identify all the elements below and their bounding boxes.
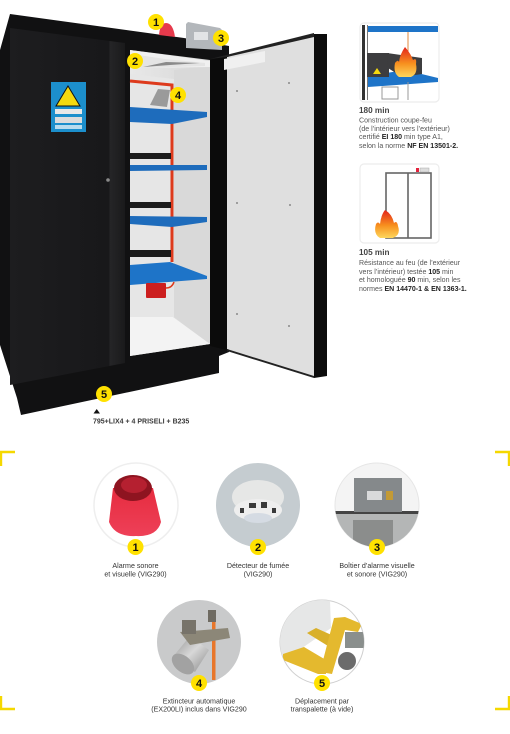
corner bracket top left xyxy=(1,452,15,466)
interior xyxy=(130,50,210,356)
text: 105 min xyxy=(359,248,467,293)
text: 105 min: normes EN 14470-1 & EN 1363-1. xyxy=(359,286,467,293)
product reference: 795+LIX4 + 4 PRISELI + B235 xyxy=(93,418,189,426)
feature 5: pallet truck: Déplacement par xyxy=(295,698,350,706)
feature 2: smoke detector: (VIG290) xyxy=(244,570,272,578)
text: 180 min: selon la norme NF EN 13501-2. xyxy=(359,143,458,150)
text: 180 min: (de l’intérieur vers l’extérieur) xyxy=(359,126,450,133)
feature 2: smoke detector: Détecteur de fumée xyxy=(227,562,289,570)
feature 4: extinguisher: Extincteur automatique xyxy=(163,698,235,706)
rails xyxy=(130,153,171,159)
shelves xyxy=(130,107,207,285)
text: 180 min: Construction coupe-feu xyxy=(359,118,432,124)
safety sign xyxy=(51,82,86,132)
text: 180 min: certifié EI 180 min type A1, xyxy=(359,134,443,141)
extinguisher xyxy=(150,89,170,107)
text: 180 min: 180 min xyxy=(359,106,390,115)
text: 105 min: et homologuée 90 min, selon les xyxy=(359,277,461,284)
feature 5: pallet truck xyxy=(280,600,365,714)
door closer xyxy=(224,51,265,70)
feature 4: extinguisher: 4 xyxy=(196,678,203,690)
feature 1: alarm xyxy=(94,463,178,578)
feature 3: alarm box: et sonore (VIG290) xyxy=(347,570,407,578)
marker 5: 5 xyxy=(101,389,107,401)
corner bracket bottom right xyxy=(495,696,509,709)
text: 180 min xyxy=(359,106,458,150)
open door frame xyxy=(210,55,227,350)
marker 1 xyxy=(148,14,164,30)
marker 2: 2 xyxy=(132,56,138,68)
text: 105 min: vers l’intérieur) testée 105 min xyxy=(359,269,453,276)
text: 105 min: Résistance au feu (de l’extérieur xyxy=(359,260,461,267)
left door xyxy=(10,28,125,385)
marker 4: 4 xyxy=(175,90,182,102)
top smoke detector plate xyxy=(132,54,205,68)
alarm box on top xyxy=(186,22,222,50)
feature 5: pallet truck: 5 xyxy=(319,678,325,690)
corner bracket bottom left xyxy=(1,696,15,709)
red cable xyxy=(130,81,172,262)
text: 105 min: 105 min xyxy=(359,248,390,257)
marker 2 xyxy=(127,53,143,69)
marker 3: 3 xyxy=(218,33,224,45)
cabinet with open door xyxy=(0,14,327,415)
feature 1: alarm: 1 xyxy=(132,542,139,554)
feature 1: alarm: Alarme sonore xyxy=(112,562,159,570)
icon: 105 min fire resistance xyxy=(360,164,439,243)
marker 4 xyxy=(170,87,186,103)
product reference xyxy=(93,409,189,426)
marker 5 xyxy=(96,386,112,402)
icon: 180 min fire construction xyxy=(360,23,439,102)
feature 3: alarm box xyxy=(335,463,419,578)
alarm on top xyxy=(159,23,175,37)
feature 5: pallet truck: transpalette (à vide) xyxy=(291,706,353,714)
marker 1: 1 xyxy=(153,17,159,29)
feature 4: extinguisher: (EX200LI) inclus dans VIG290 xyxy=(151,706,247,714)
feature 4: extinguisher xyxy=(151,600,247,714)
feature 1: alarm: et visuelle (VIG290) xyxy=(104,570,167,578)
icon: flame xyxy=(394,47,416,77)
cabinet body xyxy=(0,14,229,415)
marker 3 xyxy=(213,30,229,46)
feature 2: smoke detector: 2 xyxy=(255,542,261,554)
door fasteners xyxy=(236,82,291,327)
icon: flame xyxy=(375,210,399,238)
red box xyxy=(146,282,174,298)
feature 3: alarm box: 3 xyxy=(374,542,380,554)
open door panel xyxy=(227,36,314,376)
feature 3: alarm box: Boîtier d’alarme visuelle xyxy=(339,562,415,570)
door lock xyxy=(106,178,110,182)
corner bracket top right xyxy=(495,452,509,466)
feature 2: smoke detector xyxy=(216,463,300,578)
